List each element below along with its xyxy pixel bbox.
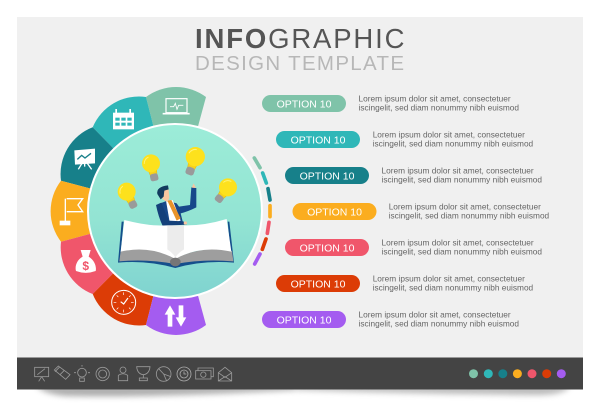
title — [195, 23, 404, 75]
option 4: Lorem ipsum dolor sit amet, consectetuer — [389, 202, 541, 212]
option 1 — [262, 94, 519, 112]
icon: bulb — [74, 365, 90, 381]
segment: top green — [146, 87, 206, 211]
segment: orange — [93, 211, 175, 325]
option 1: OPTION 10 — [277, 98, 332, 110]
option 1: Lorem ipsum dolor sit amet, consectetuer — [358, 94, 511, 104]
icon: up and down arrows — [165, 305, 186, 327]
background panel — [17, 17, 583, 358]
icon: clock — [112, 290, 136, 314]
icon: money bag — [76, 250, 96, 273]
footer bar — [17, 358, 583, 390]
footer icons — [35, 365, 232, 381]
title: INFOGRAPHIC — [195, 23, 404, 54]
option 3: OPTION 10 — [300, 170, 355, 182]
segment: red — [61, 211, 175, 294]
icon: gear — [96, 367, 109, 381]
icon: laptop — [163, 99, 190, 114]
circular diagram — [51, 87, 270, 335]
option 2 — [276, 130, 534, 148]
icon: clock — [177, 367, 191, 381]
option 7 — [262, 310, 519, 328]
icon: person — [118, 367, 128, 381]
title: DESIGN TEMPLATE — [195, 52, 404, 75]
option 4: iscingelit, sed diam nonummy nibh euismod — [389, 210, 550, 220]
option 6: iscingelit, sed diam nonummy nibh euismod — [373, 282, 534, 292]
option 6: Lorem ipsum dolor sit amet, consectetuer — [373, 274, 525, 284]
legend dots — [469, 369, 566, 378]
option 6: OPTION 10 — [291, 278, 346, 290]
bar shadow — [36, 386, 570, 396]
option 5 — [285, 238, 542, 256]
option 5: iscingelit, sed diam nonummy nibh euismod — [382, 246, 542, 256]
progress dashes — [254, 158, 270, 264]
icon: money — [196, 368, 213, 379]
option 7: OPTION 10 — [277, 314, 332, 326]
icon: trophy — [137, 367, 150, 381]
light bulbs — [115, 144, 241, 212]
option 4 — [292, 202, 550, 220]
option 3: iscingelit, sed diam nonummy nibh euismod — [382, 174, 542, 184]
option 6 — [276, 274, 534, 292]
segment: purple — [146, 211, 206, 335]
segment: teal — [93, 96, 175, 211]
option 3 — [285, 166, 542, 184]
segment: yellow — [51, 181, 175, 242]
option 7: Lorem ipsum dolor sit amet, consectetuer — [358, 310, 511, 320]
option 3: Lorem ipsum dolor sit amet, consectetuer — [382, 166, 534, 176]
icon: money bag: $ — [82, 259, 89, 273]
scaled drawing layer — [60, 99, 270, 327]
icon: envelope — [218, 367, 232, 381]
option 4: OPTION 10 — [307, 206, 362, 218]
option 2: OPTION 10 — [291, 134, 346, 146]
center circle — [88, 124, 262, 298]
segment: dark teal — [61, 127, 175, 211]
option 7: iscingelit, sed diam nonummy nibh euismod — [358, 318, 519, 328]
icon: presentation — [35, 367, 49, 381]
businessman — [156, 183, 196, 226]
icon: calendar — [113, 109, 134, 129]
option 2: iscingelit, sed diam nonummy nibh euismod — [373, 138, 534, 148]
option 5: Lorem ipsum dolor sit amet, consectetuer — [382, 238, 534, 248]
icon: flag — [60, 199, 83, 225]
option 5: OPTION 10 — [300, 242, 355, 254]
icon: chart board — [74, 149, 95, 169]
option 1: iscingelit, sed diam nonummy nibh euismod — [358, 102, 519, 112]
open book — [118, 219, 234, 268]
icon: tools — [54, 366, 70, 379]
option 2: Lorem ipsum dolor sit amet, consectetuer — [373, 130, 525, 140]
icon: pie chart — [156, 367, 171, 381]
